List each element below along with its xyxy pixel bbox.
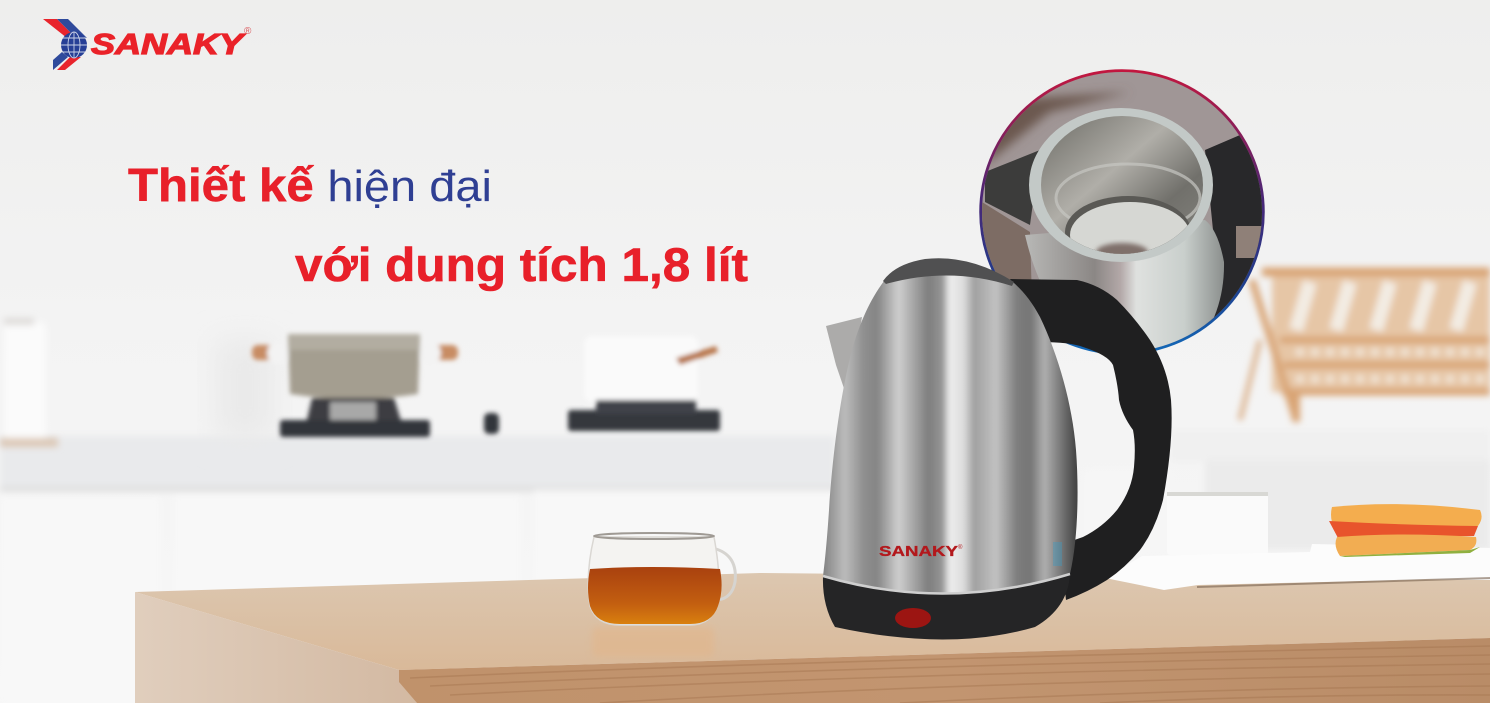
backdrop xyxy=(980,70,1270,360)
second stove and pan xyxy=(484,336,720,434)
kettle base xyxy=(823,574,1070,640)
heading line 2: với dung tích 1,8 lít xyxy=(295,238,748,291)
metal ring xyxy=(823,574,1070,594)
counter and cabinets xyxy=(0,430,1490,703)
cup reflection xyxy=(592,627,714,657)
kitchen background xyxy=(0,268,1490,703)
cup handle xyxy=(716,549,735,600)
table top surface xyxy=(135,573,1490,670)
white bowl xyxy=(1167,492,1268,555)
kettle brand: ® xyxy=(958,544,963,551)
logo globe xyxy=(61,32,87,58)
inset circle: kettle interior xyxy=(980,70,1270,360)
logo xyxy=(43,19,252,70)
kettle brand: SANAKY xyxy=(879,544,958,560)
kettle xyxy=(815,255,1172,640)
tray with bowl and sandwich xyxy=(1105,492,1490,590)
kettle inner xyxy=(1041,116,1203,254)
kettle rim xyxy=(1029,108,1213,262)
logo wordmark: SANAKY xyxy=(91,29,246,61)
kettle body xyxy=(823,276,1078,592)
kettle handle xyxy=(1010,279,1172,600)
spout xyxy=(826,317,862,400)
kettle lid xyxy=(883,258,1014,286)
pot on stove xyxy=(215,334,458,440)
black spout shadow xyxy=(985,150,1040,225)
tea xyxy=(588,567,722,624)
blurred jar on left xyxy=(0,318,58,447)
registered mark: ® xyxy=(244,26,252,37)
logo chevrons xyxy=(43,19,87,70)
table front edge xyxy=(399,638,1490,703)
power light xyxy=(895,608,931,628)
cup rim xyxy=(594,533,714,539)
tea cup xyxy=(588,533,735,657)
sticker xyxy=(1053,542,1062,566)
sandwich xyxy=(1325,504,1482,557)
kettle body xyxy=(1025,220,1224,360)
glass xyxy=(588,537,719,625)
table left side xyxy=(135,592,417,703)
table xyxy=(135,573,1490,703)
black handle mount xyxy=(1205,136,1262,325)
wooden dish rack xyxy=(1240,268,1490,422)
white tray xyxy=(1105,544,1490,590)
heading line 1: Thiết kế hiện đại xyxy=(128,159,492,211)
